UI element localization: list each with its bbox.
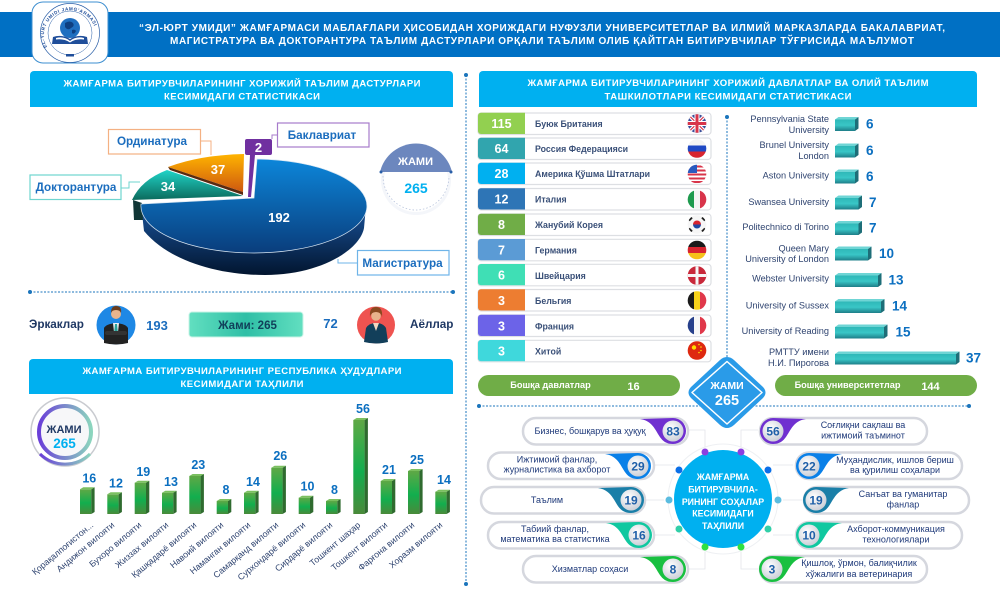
row: Америка Қўшма Штатлари 28: 28 bbox=[495, 167, 508, 181]
header title: МАГИСТРАТУРА ВА ДОКТОРАНТУРА ТАЪЛИМ ДАСТУРЛАРИ ОРҚАЛИ ТАЪЛИМ ОЛИБ ҚАЙТГАН БИТИРУВЧИЛАР ТЎҒРИСИДА МАЪЛУМОТ bbox=[170, 34, 914, 47]
panel heading: countries and universities: ТАШКИЛОТЛАРИ КЕСИМИДАГИ СТАТИСТИКАСИ bbox=[604, 92, 852, 102]
total diamond bbox=[688, 357, 766, 428]
row: Хитой 3 bbox=[478, 340, 711, 362]
gender: women: 72 bbox=[323, 316, 338, 331]
icon: Korea flag bbox=[688, 216, 706, 234]
sector: Бизнес 83: Бизнес, бошқарув ва ҳуқуқ bbox=[534, 426, 646, 436]
total ring badge bbox=[31, 398, 99, 466]
value labels: 34 bbox=[161, 179, 176, 194]
bar: Фарғона 25 bbox=[408, 453, 424, 514]
total badge bbox=[380, 144, 452, 215]
sector: Хизматлар соҳаси 8 bbox=[523, 556, 688, 582]
total ring badge: 265 bbox=[53, 436, 76, 451]
total pill: Жами: 265 bbox=[217, 320, 277, 332]
sector: Ахборот-коммуникация 10 bbox=[796, 522, 962, 548]
gender: women: Аёллар bbox=[410, 318, 453, 331]
bar: Бухоро 19: 19 bbox=[136, 465, 150, 479]
axis labels: Фарғона вилояти bbox=[356, 520, 416, 573]
sector: Ахборот-коммуникация 10: технологиялари bbox=[863, 534, 929, 544]
sector: Соғлиқни сақлаш 56 bbox=[760, 418, 927, 444]
bar: Queen Mary University of London 10: 10 bbox=[879, 246, 894, 261]
axis labels: Жиззах вилояти bbox=[113, 520, 170, 570]
bar: Webster University 13: 13 bbox=[888, 272, 904, 288]
country list bbox=[478, 113, 711, 362]
bar: Brunel University London 6 bbox=[760, 140, 874, 161]
total diamond: 265 bbox=[715, 393, 739, 409]
hub title: БИТИРУВЧИЛА- bbox=[688, 484, 758, 494]
value labels bbox=[161, 162, 290, 225]
total badge: 265 bbox=[404, 180, 428, 196]
sector: Муҳандислик 22 bbox=[796, 452, 962, 479]
label: Ординатура bbox=[108, 130, 211, 155]
divider left bbox=[28, 290, 455, 294]
divider horizontal right bbox=[477, 404, 971, 408]
label: Баклавриат: 2 bbox=[255, 140, 262, 155]
row: Жанубий Корея 8 bbox=[478, 214, 711, 236]
row: Хитой 3: Хитой bbox=[535, 346, 561, 356]
bar: РМТТУ имени Н.И. Пирогова 37: 37 bbox=[966, 350, 981, 366]
hub dots bbox=[645, 430, 802, 569]
row: Франция 3: 3 bbox=[498, 320, 505, 334]
bar: Наманган 14 bbox=[244, 475, 260, 514]
row: Италия 12: Италия bbox=[535, 194, 567, 204]
sector: Қишлоқ 3: хўжалиги ва ветеринария bbox=[806, 569, 912, 579]
icon: France flag bbox=[688, 316, 706, 334]
header banner bbox=[0, 12, 1000, 57]
bar: Қашқадарё 23 bbox=[189, 458, 205, 514]
sector: Бизнес 83 bbox=[523, 418, 688, 444]
bar: Swansea University 7: Swansea University bbox=[748, 197, 829, 207]
bar: University of Sussex 14: University of Sussex bbox=[746, 300, 829, 310]
icon: China flag bbox=[687, 340, 707, 360]
bar: Brunel University London 6: 6 bbox=[866, 143, 874, 158]
row: Бельгия 3: Бельгия bbox=[535, 296, 571, 306]
bar: Сирдарё 8 bbox=[326, 483, 341, 514]
bar: University of Sussex 14: 14 bbox=[892, 298, 908, 314]
value labels: 37 bbox=[211, 162, 225, 177]
row: Буюк Британия 115 bbox=[478, 113, 711, 134]
row: Франция 3 bbox=[478, 315, 711, 336]
sector: Муҳандислик 22: 22 bbox=[802, 460, 816, 474]
icon: Germany flag bbox=[687, 240, 707, 260]
bar: Навоий 8 bbox=[217, 483, 231, 514]
sector: Табиий фанлар 16 bbox=[488, 522, 654, 548]
label: Баклавриат bbox=[245, 123, 369, 155]
bar: University of Reading 15: 15 bbox=[896, 324, 911, 340]
bar: Brunel University London 6: Brunel University bbox=[760, 140, 829, 150]
row: Италия 12: 12 bbox=[495, 192, 508, 206]
bar: Фарғона 25: 25 bbox=[410, 453, 424, 467]
sector: Табиий фанлар 16: 16 bbox=[632, 528, 646, 542]
row: Жанубий Корея 8: Жанубий Корея bbox=[534, 220, 603, 230]
label: Баклавриат: Баклавриат bbox=[288, 129, 357, 142]
label: Магистратура bbox=[338, 250, 449, 275]
total pill bbox=[189, 312, 303, 337]
bar: Бухоро 19 bbox=[135, 465, 150, 514]
sector: Санъат 19: фанлар bbox=[887, 500, 919, 510]
axis labels: Сирдарё вилояти bbox=[273, 520, 334, 574]
icon: Belgium flag bbox=[687, 290, 707, 310]
sector: Санъат 19: Санъат ва гуманитар bbox=[859, 489, 947, 499]
row: Германия 7 bbox=[478, 239, 711, 261]
sector: Таълим 19: Таълим bbox=[531, 495, 563, 505]
icon: UK flag bbox=[687, 114, 707, 134]
hub title bbox=[682, 472, 764, 531]
axis labels: Хоразм вилояти bbox=[387, 520, 444, 570]
bar: Swansea University 7: 7 bbox=[869, 195, 877, 210]
bar: Тошкент вилояти 21 bbox=[381, 463, 396, 514]
label: Докторантура: Докторантура bbox=[36, 181, 117, 194]
slice: Магистратура 192 bbox=[141, 159, 367, 253]
row: Буюк Британия 115: Буюк Британия bbox=[535, 119, 603, 129]
bar: Тошкент вилояти 21: 21 bbox=[382, 463, 396, 477]
bar: Жиззах 13: 13 bbox=[164, 475, 178, 489]
pie chart bbox=[132, 154, 367, 275]
bar: Politechnico di Torino 7: 7 bbox=[869, 220, 877, 236]
university bars bbox=[742, 114, 981, 368]
header title: “ЭЛ-ЮРТ УМИДИ” ЖАМҒАРМАСИ МАБЛАҒЛАРИ ҲИСОБИДАН ХОРИЖДАГИ НУФУЗЛИ УНИВЕРСИТЕТЛАР ВА ИЛМИЙ МАРКАЗЛАРДА БАКАЛАВРИАТ, bbox=[139, 21, 945, 34]
bar: Қашқадарё 23: 23 bbox=[191, 458, 205, 472]
sector: Қишлоқ 3: Қишлоқ, ўрмон, балиқчилик bbox=[801, 558, 917, 568]
bar: Қорақалпоғистон 16 bbox=[80, 471, 96, 514]
icon: Russia flag bbox=[688, 140, 706, 158]
bar: Queen Mary University of London 10: University of London bbox=[745, 254, 829, 264]
bar: Тошкент шаҳар 56: 56 bbox=[356, 402, 370, 416]
other countries pill: Бошқа давлатлар bbox=[510, 380, 591, 390]
bar: University of Reading 15 bbox=[742, 324, 911, 340]
header title bbox=[139, 21, 945, 47]
logo: EL-YURT UMIDI JAMG'ARMASI bbox=[40, 7, 97, 48]
bar: Aston University 6 bbox=[763, 169, 874, 184]
sector: Санъат 19: 19 bbox=[809, 494, 823, 508]
axis labels: Қашқадарё вилояти bbox=[129, 520, 198, 580]
slice side depth bbox=[141, 204, 366, 275]
gender: men bbox=[29, 306, 168, 344]
hub title: РИНИНГ СОҲАЛАР bbox=[682, 497, 764, 507]
bar: Webster University 13 bbox=[752, 272, 904, 288]
hub title: ЖАМҒАРМА bbox=[696, 472, 750, 482]
other countries pill: 16 bbox=[627, 381, 640, 393]
row: Франция 3: Франция bbox=[535, 322, 574, 332]
bar: Brunel University London 6: London bbox=[798, 151, 829, 161]
sector: Санъат 19 bbox=[803, 487, 969, 514]
row: Италия 12 bbox=[478, 188, 711, 210]
axis labels: Сурхондарё вилояти bbox=[236, 520, 307, 582]
axis labels: Навоий вилояти bbox=[168, 520, 225, 570]
row: Германия 7: Германия bbox=[535, 246, 577, 256]
row: Германия 7: 7 bbox=[498, 244, 505, 258]
bar: Pennsylvania State University 6: Pennsylvania State bbox=[750, 114, 829, 124]
bar: Pennsylvania State University 6: 6 bbox=[866, 116, 874, 132]
icon: woman avatar bbox=[357, 306, 395, 344]
axis labels: Наманган вилояти bbox=[188, 520, 252, 576]
label: Докторантура bbox=[30, 175, 140, 200]
value labels: 192 bbox=[268, 210, 290, 225]
panel heading: countries and universities bbox=[479, 71, 977, 107]
slice: Баклавриат 2 bbox=[248, 155, 255, 197]
sector: Таълим 19 bbox=[481, 487, 645, 514]
sector: Муҳандислик 22: Муҳандислик, ишлов бериш bbox=[836, 455, 954, 465]
slice: Ординатура 37 bbox=[168, 154, 244, 192]
bar: Қорақалпоғистон 16: 16 bbox=[82, 471, 96, 485]
divider vertical bbox=[464, 73, 468, 586]
total diamond: ЖАМИ bbox=[709, 380, 744, 392]
bar: Webster University 13: Webster University bbox=[752, 274, 829, 284]
slice: Докторантура 34 bbox=[132, 170, 243, 200]
bar: Queen Mary University of London 10: Queen Mary bbox=[778, 244, 829, 254]
bar: Самарқанд 26 bbox=[271, 449, 287, 514]
bar: Сурхондарё 10: 10 bbox=[301, 480, 314, 494]
bar: Хоразм 14: 14 bbox=[437, 473, 451, 487]
sector: Қишлоқ 3 bbox=[759, 556, 927, 582]
bar: Тошкент шаҳар 56 bbox=[353, 402, 370, 514]
icon: Italy flag bbox=[688, 190, 706, 208]
total ring badge: ЖАМИ bbox=[46, 424, 82, 436]
icon: USA flag bbox=[688, 164, 706, 183]
row: Буюк Британия 115: 115 bbox=[491, 117, 512, 131]
sector: Ахборот-коммуникация 10: Ахборот-коммуникация bbox=[847, 524, 945, 534]
bar: Swansea University 7 bbox=[748, 195, 877, 210]
bar: Сурхондарё 10 bbox=[299, 480, 314, 514]
sector: Хизматлар соҳаси 8: 8 bbox=[670, 562, 677, 576]
axis labels: Тошкент шаҳар bbox=[308, 520, 362, 568]
bar: РМТТУ имени Н.И. Пирогова 37: Н.И. Пирогова bbox=[768, 358, 830, 368]
sector: Муҳандислик 22: ва қурилиш соҳалари bbox=[850, 465, 940, 475]
label: Ординатура: Ординатура bbox=[117, 135, 188, 148]
row: Швейцария 6 bbox=[478, 264, 711, 286]
hub title: ТАҲЛИЛИ bbox=[702, 521, 744, 531]
row: Швейцария 6: Швейцария bbox=[535, 271, 586, 281]
gender: men: Эркаклар bbox=[29, 318, 84, 331]
sector: Ижтимоий фанлар 29: 29 bbox=[631, 460, 645, 474]
bar: Politechnico di Torino 7: Politechnico di Torino bbox=[742, 222, 829, 232]
vertical divider right bbox=[725, 115, 729, 358]
panel heading: regions: ЖАМҒАРМА БИТИРУВЧИЛАРИНИНГ РЕСПУБЛИКА ҲУДУДЛАРИ bbox=[82, 366, 402, 377]
sector: Табиий фанлар 16: Табиий фанлар, bbox=[521, 524, 589, 534]
bar: Pennsylvania State University 6: University bbox=[789, 125, 829, 135]
other universities pill bbox=[775, 375, 977, 396]
row: Бельгия 3: 3 bbox=[498, 294, 505, 308]
axis labels: Тошкент вилояти bbox=[329, 520, 389, 573]
row: Жанубий Корея 8: 8 bbox=[498, 218, 505, 232]
bar: Андижон 12 bbox=[107, 476, 123, 514]
icon: Switzerland flag bbox=[687, 266, 707, 286]
gender: men: 193 bbox=[146, 318, 168, 333]
axis labels: Қорақалпоғистон... bbox=[30, 520, 95, 577]
bar: Хоразм 14 bbox=[435, 473, 451, 514]
row: Россия Федерацияси 64: Россия Федерацияси bbox=[535, 144, 628, 154]
sector: Ижтимоий фанлар 29: Ижтимоий фанлар, bbox=[517, 454, 597, 464]
other countries pill bbox=[478, 375, 680, 396]
other universities pill: 144 bbox=[921, 381, 941, 393]
sector: Қишлоқ 3: 3 bbox=[769, 562, 776, 576]
logo bbox=[32, 2, 108, 64]
bar: РМТТУ имени Н.И. Пирогова 37 bbox=[768, 347, 981, 368]
sector: Соғлиқни сақлаш 56: ижтимоий таъминот bbox=[821, 430, 905, 440]
bar: Жиззах 13 bbox=[162, 475, 178, 514]
bar: РМТТУ имени Н.И. Пирогова 37: РМТТУ имени bbox=[769, 347, 829, 357]
bar: Aston University 6: Aston University bbox=[763, 170, 829, 180]
sector: Соғлиқни сақлаш 56: 56 bbox=[766, 424, 780, 438]
sector: Табиий фанлар 16: математика ва статистика bbox=[500, 534, 610, 544]
bar: University of Sussex 14 bbox=[746, 298, 908, 314]
panel heading: regions: КЕСИМИДАГИ ТАҲЛИЛИ bbox=[180, 379, 304, 390]
axis labels: Самарқанд вилояти bbox=[211, 520, 280, 580]
row: Америка Қўшма Штатлари 28: Америка Қўшма Штатлари bbox=[535, 169, 650, 179]
sector: Бизнес 83: 83 bbox=[666, 424, 680, 438]
row: Россия Федерацияси 64 bbox=[478, 138, 711, 160]
bar: Aston University 6: 6 bbox=[866, 169, 874, 184]
row: Америка Қўшма Штатлари 28 bbox=[478, 163, 711, 184]
axis labels: Андижон вилояти bbox=[54, 520, 116, 574]
row: Швейцария 6: 6 bbox=[498, 268, 505, 282]
sector: Соғлиқни сақлаш 56: Соғлиқни сақлаш ва bbox=[821, 420, 905, 430]
panel heading: programmes bbox=[30, 71, 453, 107]
axis labels bbox=[30, 520, 444, 582]
bar: Самарқанд 26: 26 bbox=[273, 449, 287, 463]
gender: women bbox=[323, 306, 453, 344]
bar chart: regions bbox=[30, 402, 451, 582]
sector: Ижтимоий фанлар 29: журналистика ва ахборот bbox=[504, 464, 610, 474]
bar: Андижон 12: 12 bbox=[109, 476, 123, 490]
bar: Навоий 8: 8 bbox=[223, 483, 230, 497]
sector: Хизматлар соҳаси 8: Хизматлар соҳаси bbox=[552, 564, 628, 574]
total badge: ЖАМИ bbox=[397, 156, 433, 168]
panel heading: programmes: ЖАМҒАРМА БИТИРУВЧИЛАРИНИНГ ХОРИЖИЙ ТАЪЛИМ ДАСТУРЛАРИ bbox=[62, 78, 421, 90]
sector: Ахборот-коммуникация 10: 10 bbox=[802, 528, 816, 542]
icon: man avatar bbox=[96, 306, 136, 344]
bar: Наманган 14: 14 bbox=[246, 475, 260, 489]
hub title: КЕСИМИДАГИ bbox=[692, 508, 754, 518]
bar: Pennsylvania State University 6 bbox=[750, 114, 874, 135]
row: Хитой 3: 3 bbox=[498, 344, 505, 358]
axis labels: Бухоро вилояти bbox=[87, 520, 143, 569]
row: Россия Федерацияси 64: 64 bbox=[495, 142, 508, 156]
sector: Таълим 19: 19 bbox=[624, 494, 638, 508]
bar: Сирдарё 8: 8 bbox=[331, 483, 338, 497]
sector: Ижтимоий фанлар 29 bbox=[488, 452, 654, 479]
panel heading: regions bbox=[29, 359, 453, 394]
label: Магистратура: Магистратура bbox=[362, 257, 443, 270]
bar: Politechnico di Torino 7 bbox=[742, 220, 877, 236]
other universities pill: Бошқа университетлар bbox=[795, 380, 901, 390]
row: Бельгия 3 bbox=[478, 289, 711, 311]
panel heading: programmes: КЕСИМИДАГИ СТАТИСТИКАСИ bbox=[164, 92, 320, 102]
bar: University of Reading 15: University of Reading bbox=[742, 326, 829, 336]
bar: Queen Mary University of London 10 bbox=[745, 244, 894, 264]
panel heading: countries and universities: ЖАМҒАРМА БИТИРУВЧИЛАРИНИНГ ХОРИЖИЙ ДАВЛАТЛАР ВА ОЛИЙ ТАЪЛИМ bbox=[526, 77, 929, 89]
sector hub bbox=[645, 430, 802, 569]
